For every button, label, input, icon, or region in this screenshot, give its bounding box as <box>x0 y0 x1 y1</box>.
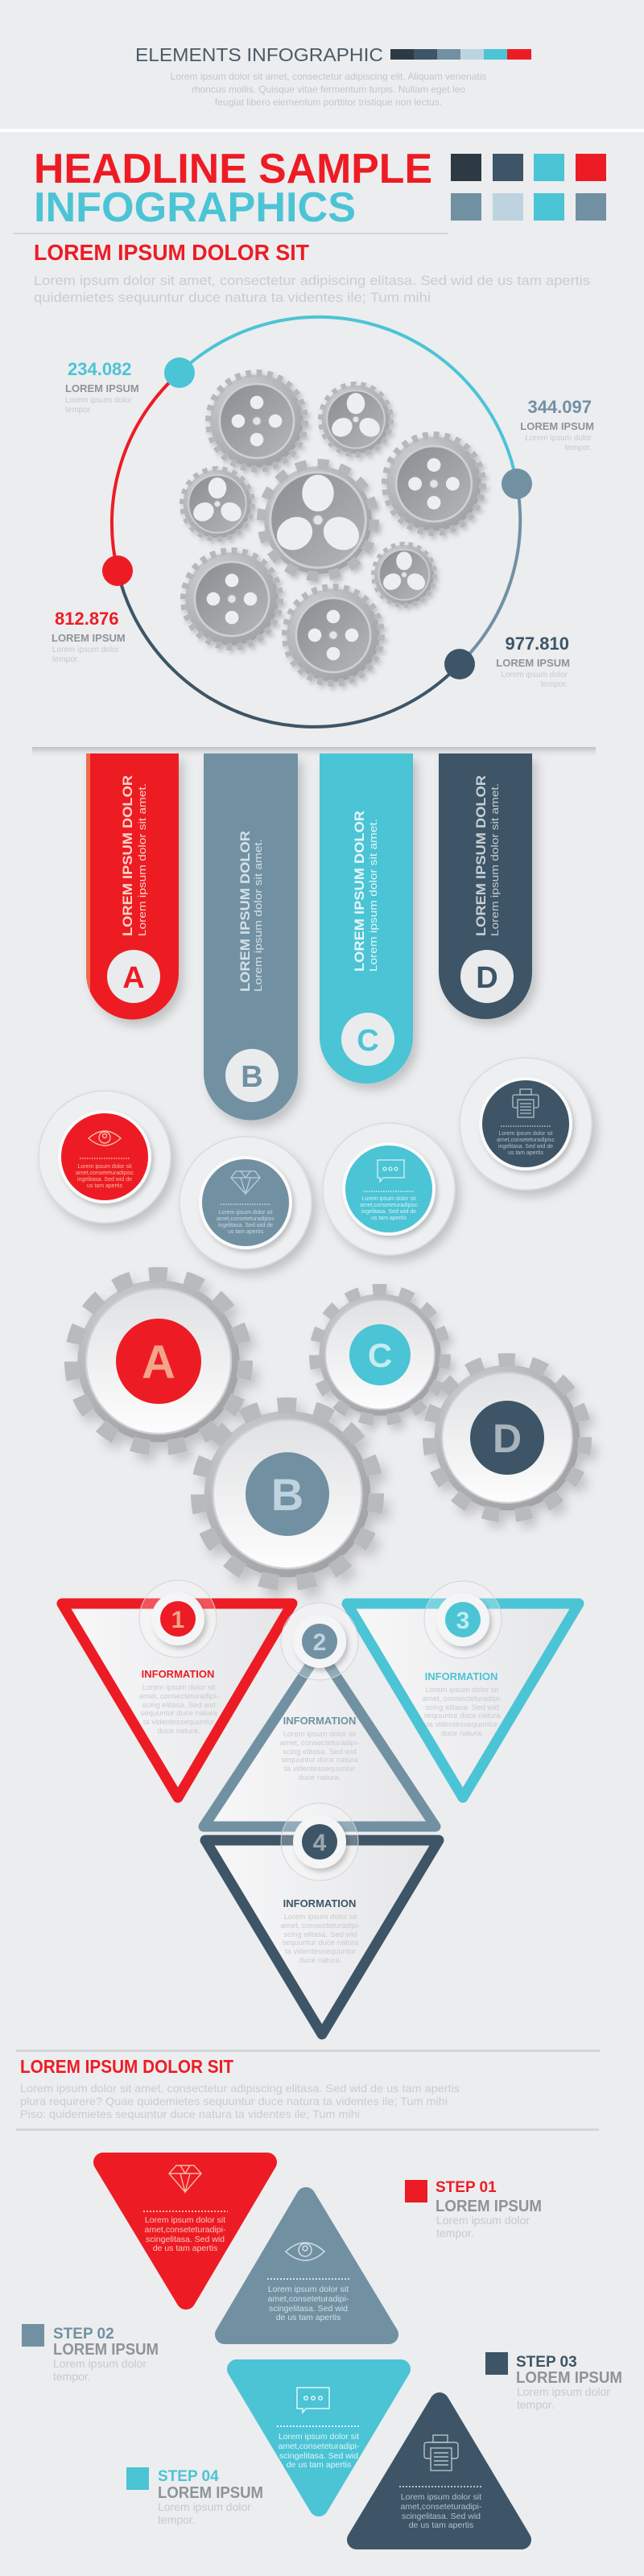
triangle 4 (dark): INFORMATION <box>283 1897 356 1909</box>
triangle 2 (slate): scing elitasa. Sed wid <box>283 1748 357 1757</box>
ribbon B: B <box>241 1060 263 1094</box>
step triangle dark: Lorem ipsum dolor sit <box>401 2492 481 2502</box>
number badges: 4 <box>313 1830 327 1856</box>
header paragraph: Lorem ipsum dolor sit amet, consectetur adipiscing elit. Aliquam venenatis <box>171 71 486 82</box>
info circle: eye (red): us tam apertis <box>87 1183 122 1189</box>
step triangle slate <box>225 2197 389 2334</box>
step triangle slate: Lorem ipsum dolor sit <box>268 2285 349 2294</box>
step 04 label: tempor. <box>158 2513 196 2526</box>
step triangle red <box>103 2162 267 2300</box>
triangle 4 (dark): amet, consecteturadipi- <box>281 1922 360 1930</box>
triangle 2 (slate): duce natura. <box>299 1773 341 1782</box>
info circle: chat (cyan) <box>323 1123 455 1255</box>
step 01 label: LOREM IPSUM <box>436 2198 542 2215</box>
step 01 label <box>405 2179 542 2240</box>
info circle: diamond (slate): amet,conseteturadipisc <box>217 1216 275 1222</box>
step triangle cyan: de us tam apertis <box>287 2460 351 2470</box>
triangle 3 (cyan): INFORMATION <box>425 1670 497 1682</box>
info circle: diamond (slate) <box>180 1137 312 1269</box>
step triangle dark <box>357 2402 522 2540</box>
icon: chat <box>297 2388 329 2413</box>
stat 977.810: Lorem ipsum dolor <box>501 671 568 679</box>
ribbon B: LOREM IPSUM DOLOR <box>237 831 253 992</box>
triangle 4 (dark): Lorem ipsum dolor sit <box>284 1913 357 1922</box>
headline: HEADLINE SAMPLE <box>34 146 432 192</box>
step triangle cyan: scingelitasa. Sed wid <box>279 2451 358 2461</box>
triangle 4 (dark): duce natura. <box>299 1956 341 1965</box>
triangle 4 (dark): ta videntessequuntur <box>285 1947 356 1956</box>
icon: printer <box>424 2435 458 2471</box>
stat 344.097: Lorem ipsum dolor <box>525 434 592 443</box>
step triangle cyan <box>237 2369 401 2507</box>
stat 344.097 <box>520 397 594 452</box>
triangle 4 (dark): sequuntur duce natura <box>282 1938 359 1947</box>
number badges: 3 <box>456 1608 469 1634</box>
step triangle red: scingelitasa. Sed wid <box>146 2235 225 2244</box>
stat 812.876 <box>52 609 126 664</box>
stat 344.097: tempor. <box>565 444 592 452</box>
triangle 3 (cyan): duce natura. <box>441 1729 483 1738</box>
triangle 1 (red): scing elitasa. Sed wid <box>142 1701 216 1710</box>
step triangle dark: de us tam apertis <box>409 2520 473 2530</box>
stat 977.810: 977.810 <box>505 634 569 654</box>
ribbon A <box>86 753 179 1019</box>
stat 344.097: LOREM IPSUM <box>520 420 594 432</box>
step triangle dark: amet,conseteturadipi- <box>401 2502 482 2512</box>
number badges: 1 <box>171 1607 184 1633</box>
stat 234.082: Lorem ipsum dolor <box>65 396 132 405</box>
step 04 label: LOREM IPSUM <box>158 2484 263 2502</box>
info circle: printer (dark): ingelitasa. Sed wid de <box>498 1144 553 1150</box>
ribbon A: A <box>122 961 145 995</box>
info circle: eye (red): ingelitasa. Sed wid de <box>77 1177 132 1183</box>
icon: diamond <box>169 2165 201 2192</box>
intro paragraph: quidemietes sequuntur duce natura ta videntes ile; Tum mihi <box>34 290 431 305</box>
step 02 label <box>22 2324 159 2383</box>
ribbon C <box>320 753 413 1084</box>
triangle 1 (red): sequuntur duce natura <box>140 1709 217 1718</box>
triangle 2 (slate): amet, consecteturadipi- <box>280 1739 359 1748</box>
stat 234.082: tempor. <box>65 406 92 415</box>
gear cycle ring <box>102 317 532 727</box>
info circle: chat (cyan): Lorem ipsum dolor sit <box>362 1196 416 1202</box>
step triangle red: Lorem ipsum dolor sit <box>145 2215 225 2225</box>
triangle 1 (red) <box>62 1604 292 1798</box>
info circle: eye (red): Lorem ipsum dolor sit <box>78 1164 132 1170</box>
step 02 label: LOREM IPSUM <box>53 2341 159 2359</box>
info circle: chat (cyan): ingelitasa. Sed wid de <box>361 1209 416 1215</box>
step 01 label: tempor. <box>436 2227 474 2240</box>
icon: printer <box>513 1089 539 1117</box>
header paragraph <box>171 71 486 108</box>
step triangle red: amet,conseteturadipi- <box>145 2225 226 2235</box>
stat 234.082 <box>65 359 139 415</box>
ribbon B <box>204 753 298 1121</box>
gear A: A <box>142 1336 175 1389</box>
intro paragraph: Lorem ipsum dolor sit amet, consectetur adipiscing elitasa. Sed wid de us tam apertis <box>34 273 590 288</box>
ribbon A: LOREM IPSUM DOLOR <box>120 775 135 936</box>
step 03 label: tempor. <box>517 2398 555 2411</box>
triangle 3 (cyan): sequuntur duce natura <box>423 1711 501 1720</box>
info circle: diamond (slate): Lorem ipsum dolor sit <box>219 1210 273 1216</box>
section 2 paragraph: plura requirere? Quae quidemietes sequuntur duce natura ta videntes ile; Tum mihi <box>20 2095 448 2107</box>
step 03 label <box>485 2352 622 2411</box>
ribbon C: C <box>357 1024 379 1058</box>
info circle: chat (cyan): us tam apertis <box>371 1216 407 1221</box>
stat 812.876: 812.876 <box>55 609 119 629</box>
ribbon D: LOREM IPSUM DOLOR <box>473 775 489 936</box>
palette squares <box>451 154 606 221</box>
info circle: diamond (slate): ingelitasa. Sed wid de <box>218 1223 273 1228</box>
step 03 label: STEP 03 <box>516 2354 577 2371</box>
stat 812.876: Lorem ipsum dolor <box>52 646 119 654</box>
step 03 label: LOREM IPSUM <box>516 2369 622 2387</box>
step triangle cyan: amet,conseteturadipi- <box>279 2442 360 2451</box>
triangle 2 (slate) <box>204 1651 436 1827</box>
number badges <box>139 1580 502 1880</box>
step 02 label: STEP 02 <box>53 2326 114 2343</box>
info circle: eye (red): amet,conseteturadipisc <box>76 1170 134 1176</box>
gear B: B <box>271 1469 303 1520</box>
triangle 1 (red): ta videntessequuntur <box>143 1718 214 1727</box>
step triangle cyan: Lorem ipsum dolor sit <box>279 2432 359 2442</box>
step 04 label: STEP 04 <box>158 2468 219 2485</box>
step 01 label: STEP 01 <box>436 2179 497 2196</box>
triangle 1 (red): duce natura. <box>158 1727 200 1736</box>
stat 344.097: 344.097 <box>527 397 592 417</box>
stat 234.082: LOREM IPSUM <box>65 382 139 394</box>
icon: eye <box>89 1131 121 1146</box>
info circle: diamond (slate): us tam apertis <box>228 1229 263 1235</box>
ribbon C: Lorem ipsum dolor sit amet. <box>367 819 379 972</box>
gear cluster <box>182 373 482 683</box>
triangle 3 (cyan): ta videntessequuntur <box>427 1720 497 1729</box>
stat 234.082: 234.082 <box>68 359 132 379</box>
icon: eye <box>286 2243 324 2260</box>
info circle: printer (dark) <box>460 1058 592 1190</box>
icon: diamond <box>231 1171 260 1194</box>
triangle 4 (dark) <box>205 1840 439 2034</box>
triangle 3 (cyan): Lorem ipsum dolor sit <box>426 1686 499 1695</box>
header paragraph: rhoncus mollis. Quisque vitae fermentum turpis. Nullam eget leo <box>192 84 465 95</box>
header paragraph: feugiat libero elementum porttitor tristique non lectus. <box>215 97 442 108</box>
stat 812.876: LOREM IPSUM <box>52 632 126 644</box>
ribbon A: Lorem ipsum dolor sit amet. <box>136 783 148 936</box>
info circle: printer (dark): Lorem ipsum dolor sit <box>499 1131 553 1137</box>
ribbon C: LOREM IPSUM DOLOR <box>352 811 367 972</box>
step triangle slate: de us tam apertis <box>276 2313 341 2322</box>
header title: ELEMENTS INFOGRAPHIC <box>135 44 383 65</box>
gear C: C <box>368 1336 392 1374</box>
info circle: eye (red) <box>39 1091 171 1223</box>
triangle 2 (slate): sequuntur duce natura <box>281 1756 358 1765</box>
section 2 paragraph <box>20 2082 460 2120</box>
ribbon D <box>439 753 532 1019</box>
section 2 paragraph: Lorem ipsum dolor sit amet, consectetur adipiscing elitasa. Sed wid de us tam apertis <box>20 2082 460 2095</box>
info circle: printer (dark): amet,conseteturadipisc <box>497 1137 555 1143</box>
ribbon D: Lorem ipsum dolor sit amet. <box>489 783 501 936</box>
icon: chat bubble <box>378 1160 404 1182</box>
section 2 paragraph: Piso: quidemietes sequuntur duce natura ta videntes ile; Tum mihi <box>20 2107 360 2120</box>
triangle 3 (cyan): scing elitasa. Sed wid <box>425 1703 499 1712</box>
gear D <box>429 1360 585 1516</box>
triangle 1 (red): INFORMATION <box>142 1668 214 1680</box>
stat 977.810 <box>496 634 570 689</box>
step triangle dark: scingelitasa. Sed wid <box>402 2512 481 2521</box>
gear D: D <box>493 1416 522 1461</box>
gear C <box>315 1290 445 1420</box>
step 04 label <box>126 2467 263 2526</box>
ribbon D: D <box>476 961 498 995</box>
step 03 label: Lorem ipsum dolor <box>517 2385 610 2398</box>
header title <box>135 44 531 65</box>
step triangle slate: scingelitasa. Sed wid <box>269 2304 348 2314</box>
intro paragraph <box>34 273 590 305</box>
step triangle slate: amet,conseteturadipi- <box>268 2294 349 2304</box>
triangle 3 (cyan) <box>347 1604 579 1798</box>
header colour swatches <box>390 49 531 60</box>
headline: INFOGRAPHICS <box>34 184 356 231</box>
triangle 2 (slate): Lorem ipsum dolor sit <box>283 1730 357 1739</box>
section 2 heading: LOREM IPSUM DOLOR SIT <box>20 2056 233 2077</box>
stat 812.876: tempor. <box>52 655 79 664</box>
triangle 4 (dark): scing elitasa. Sed wid <box>283 1930 357 1939</box>
ribbon B: Lorem ipsum dolor sit amet. <box>252 839 264 992</box>
step 02 label: Lorem ipsum dolor <box>53 2357 147 2370</box>
gear B <box>199 1406 376 1583</box>
triangle 3 (cyan): amet, consecteturadipi- <box>423 1695 502 1703</box>
step triangle red: de us tam apertis <box>153 2244 217 2253</box>
info circle: chat (cyan): amet,conseteturadipisc <box>360 1203 418 1208</box>
triangle 2 (slate): INFORMATION <box>283 1715 356 1727</box>
triangle 1 (red): Lorem ipsum dolor sit <box>142 1683 216 1692</box>
step 02 label: tempor. <box>53 2370 91 2383</box>
stat 977.810: LOREM IPSUM <box>496 657 570 669</box>
gear A <box>72 1274 246 1448</box>
number badges: 2 <box>313 1629 326 1656</box>
info circle: printer (dark): us tam apertis <box>508 1150 543 1156</box>
stat 977.810: tempor. <box>541 680 568 689</box>
ribbon shadow bar <box>32 747 596 758</box>
step 01 label: Lorem ipsum dolor <box>436 2214 530 2227</box>
headline <box>34 146 432 231</box>
subheading: LOREM IPSUM DOLOR SIT <box>34 240 309 265</box>
triangle 1 (red): amet, consecteturadipi- <box>139 1692 218 1701</box>
triangle 2 (slate): ta videntessequuntur <box>284 1765 355 1773</box>
step 04 label: Lorem ipsum dolor <box>158 2500 251 2513</box>
